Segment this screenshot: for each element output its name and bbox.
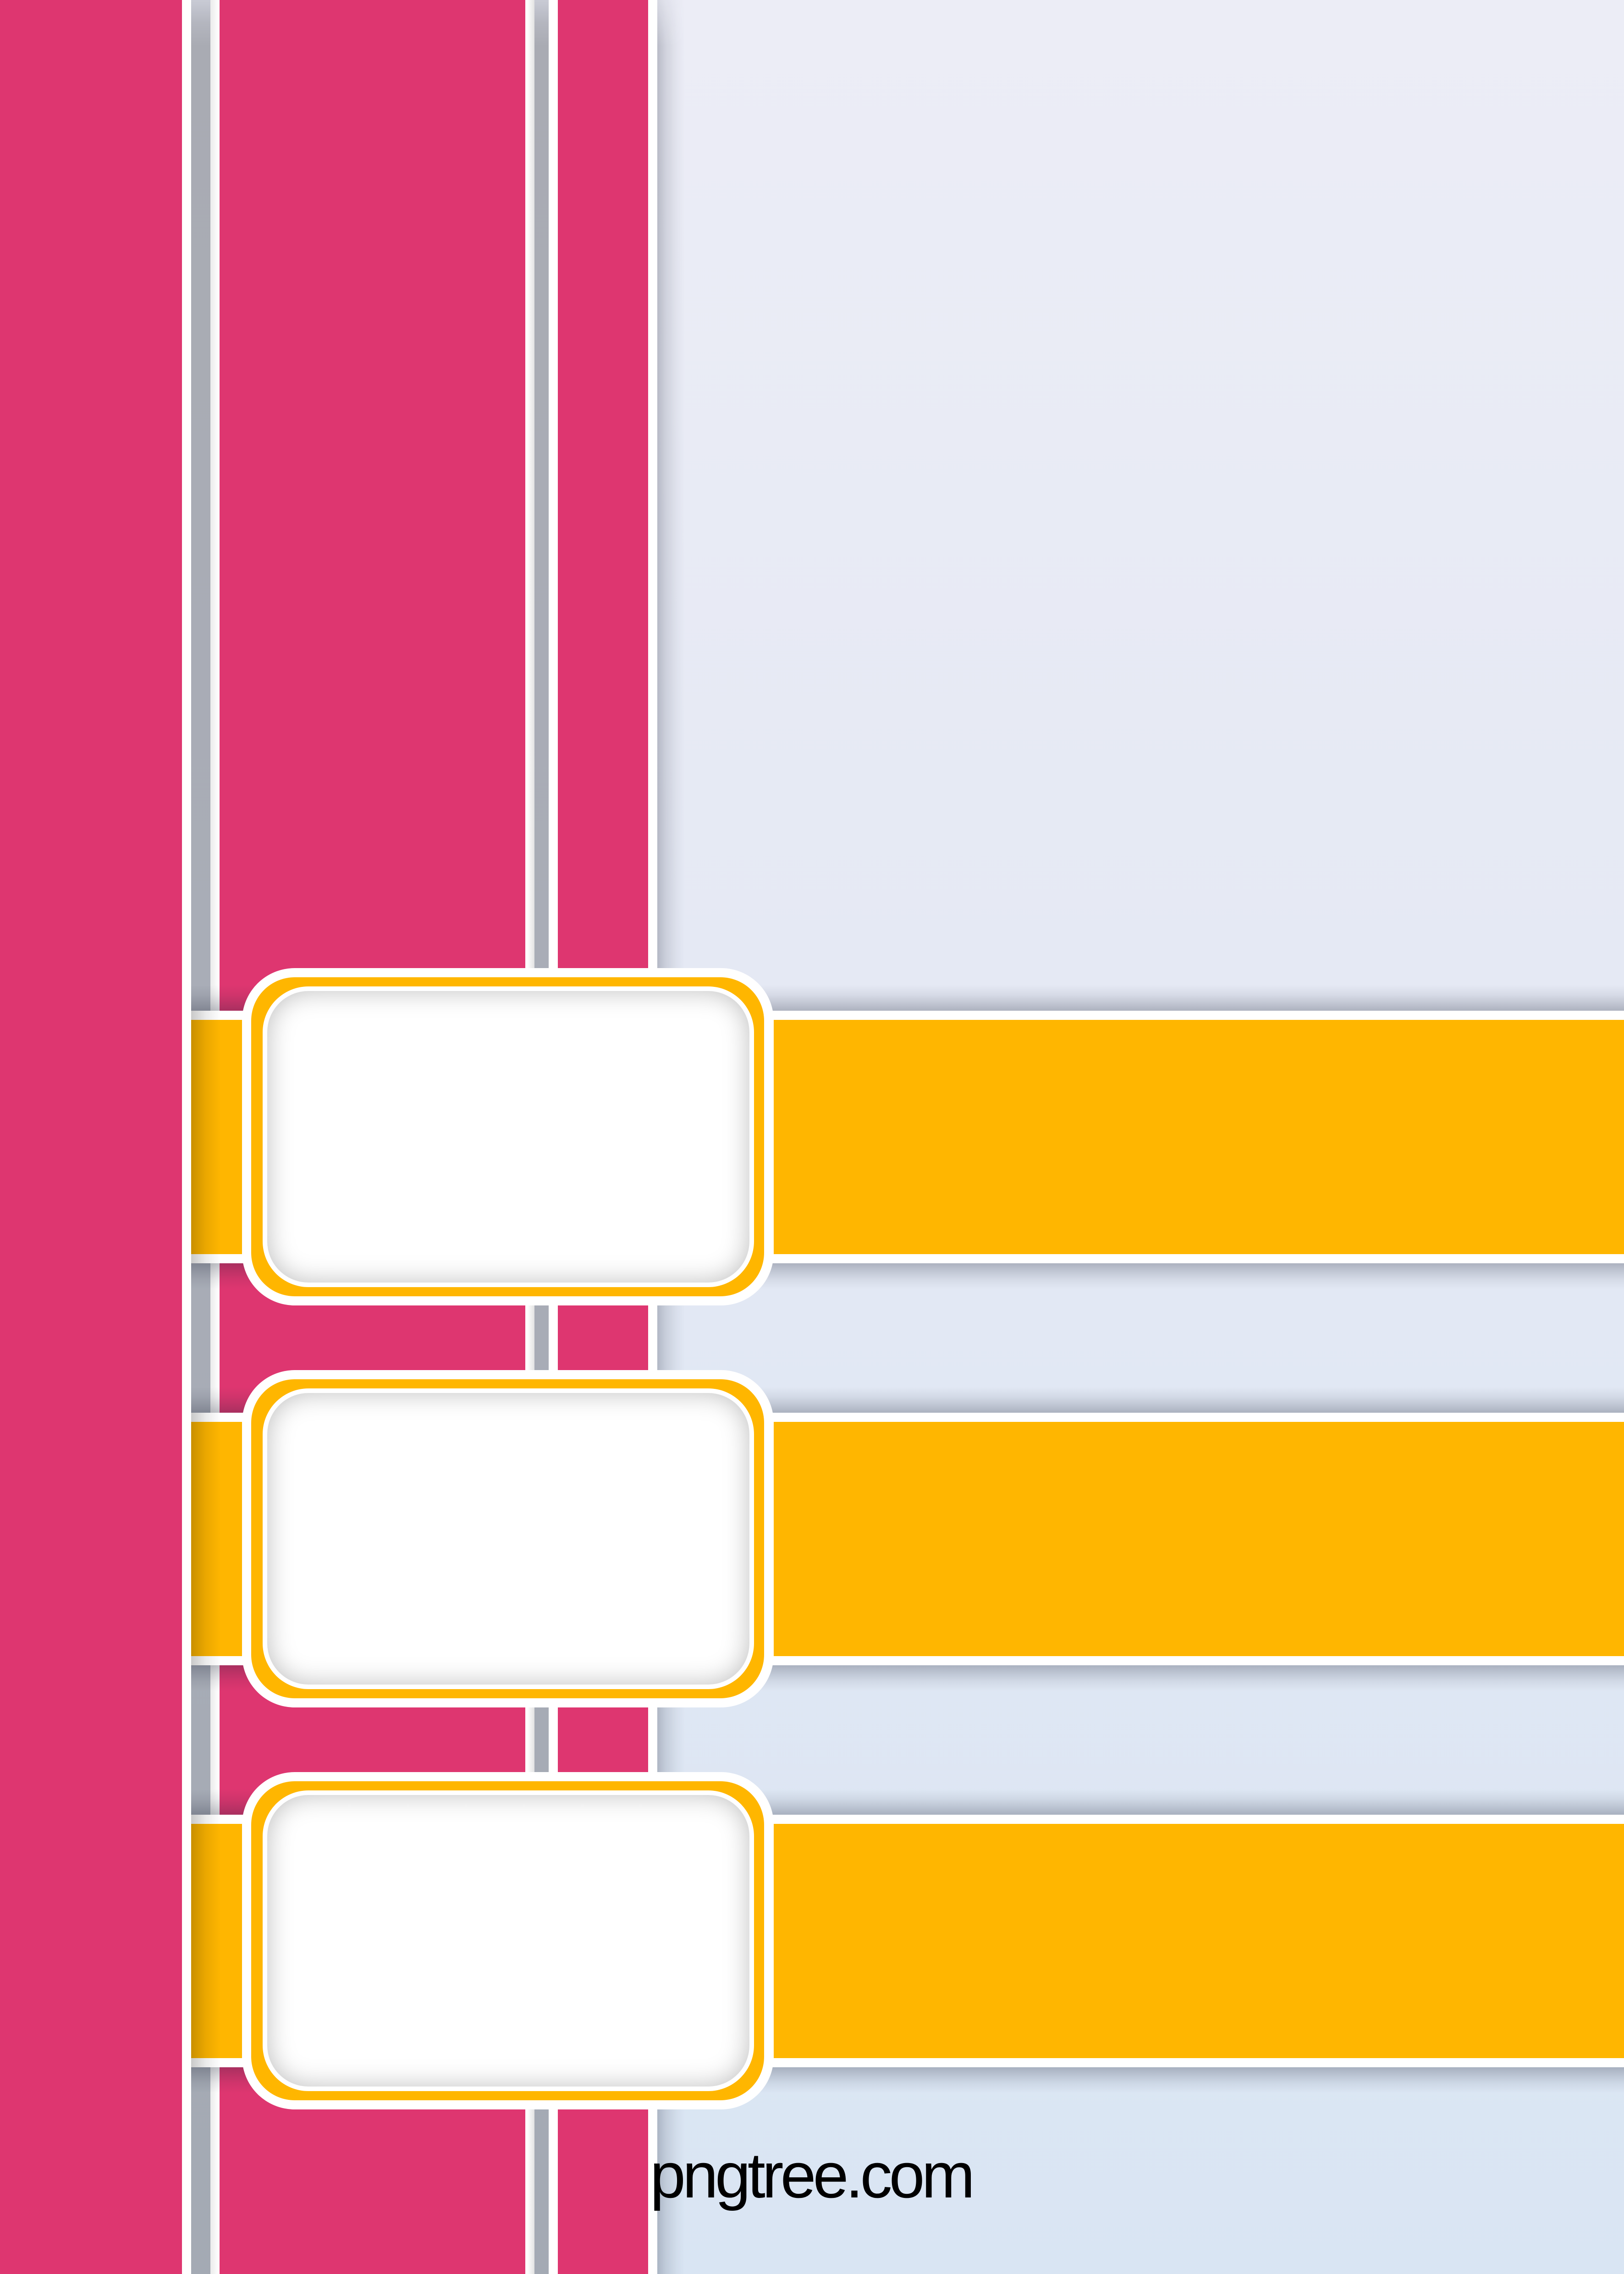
card 3 white ring: [263, 1790, 754, 2091]
ribbon shadow above: [191, 985, 1624, 1011]
watermark text: pngtree.com: [650, 2139, 972, 2211]
ribbon row 2: [0, 1370, 1624, 1707]
ribbon left edge shading: [191, 1815, 221, 2067]
grey strip: right: [534, 0, 549, 2274]
card 3 yellow frame: [251, 1781, 764, 2100]
ribbon left edge shading: [191, 1413, 221, 1665]
ribbon row 1: [0, 968, 1624, 1305]
card 3 blank panel: [267, 1795, 749, 2087]
card 2 blank panel: [267, 1393, 749, 1685]
card 1 blank panel: [267, 991, 749, 1283]
white strip: centre column edge: [525, 0, 534, 2274]
yellow ribbon: [191, 1413, 1624, 1665]
yellow ribbon: [191, 1815, 1624, 2067]
ribbon shadow above: [191, 1789, 1624, 1815]
card 1 white ring: [263, 986, 754, 1287]
ribbon shadow above: [191, 1387, 1624, 1413]
shadow cast by the columns on the background: [657, 0, 677, 2274]
ribbon right segment: [774, 1824, 1624, 2058]
card 2 white ring: [263, 1388, 754, 1689]
card 2 yellow frame: [251, 1379, 764, 1698]
card 1: [242, 968, 774, 1305]
white strip: right of centre: [549, 0, 558, 2274]
ribbon right segment: [774, 1020, 1624, 1254]
white strip: left column edge: [210, 0, 220, 2274]
ribbon left segment: [191, 1422, 242, 1656]
pink column: narrow: [558, 0, 648, 2274]
ribbon left segment: [191, 1824, 242, 2058]
ribbon left edge shading: [191, 1011, 221, 1263]
ribbon right segment: [774, 1422, 1624, 1656]
white strip: far left column edge: [182, 0, 191, 2274]
ribbon shadow below: [191, 2067, 1624, 2093]
card 1 yellow frame: [251, 977, 764, 1296]
ribbon shadow below: [191, 1263, 1624, 1289]
ribbon shadow below: [191, 1665, 1624, 1691]
ribbon left segment: [191, 1020, 242, 1254]
pink column: far left: [0, 0, 182, 2274]
yellow ribbon: [191, 1011, 1624, 1263]
grey strip: left: [191, 0, 210, 2274]
card 2: [242, 1370, 774, 1707]
pink column: centre: [220, 0, 525, 2274]
ribbon row 3: [0, 1772, 1624, 2109]
card 3: [242, 1772, 774, 2109]
white strip: narrow column edge: [648, 0, 657, 2274]
